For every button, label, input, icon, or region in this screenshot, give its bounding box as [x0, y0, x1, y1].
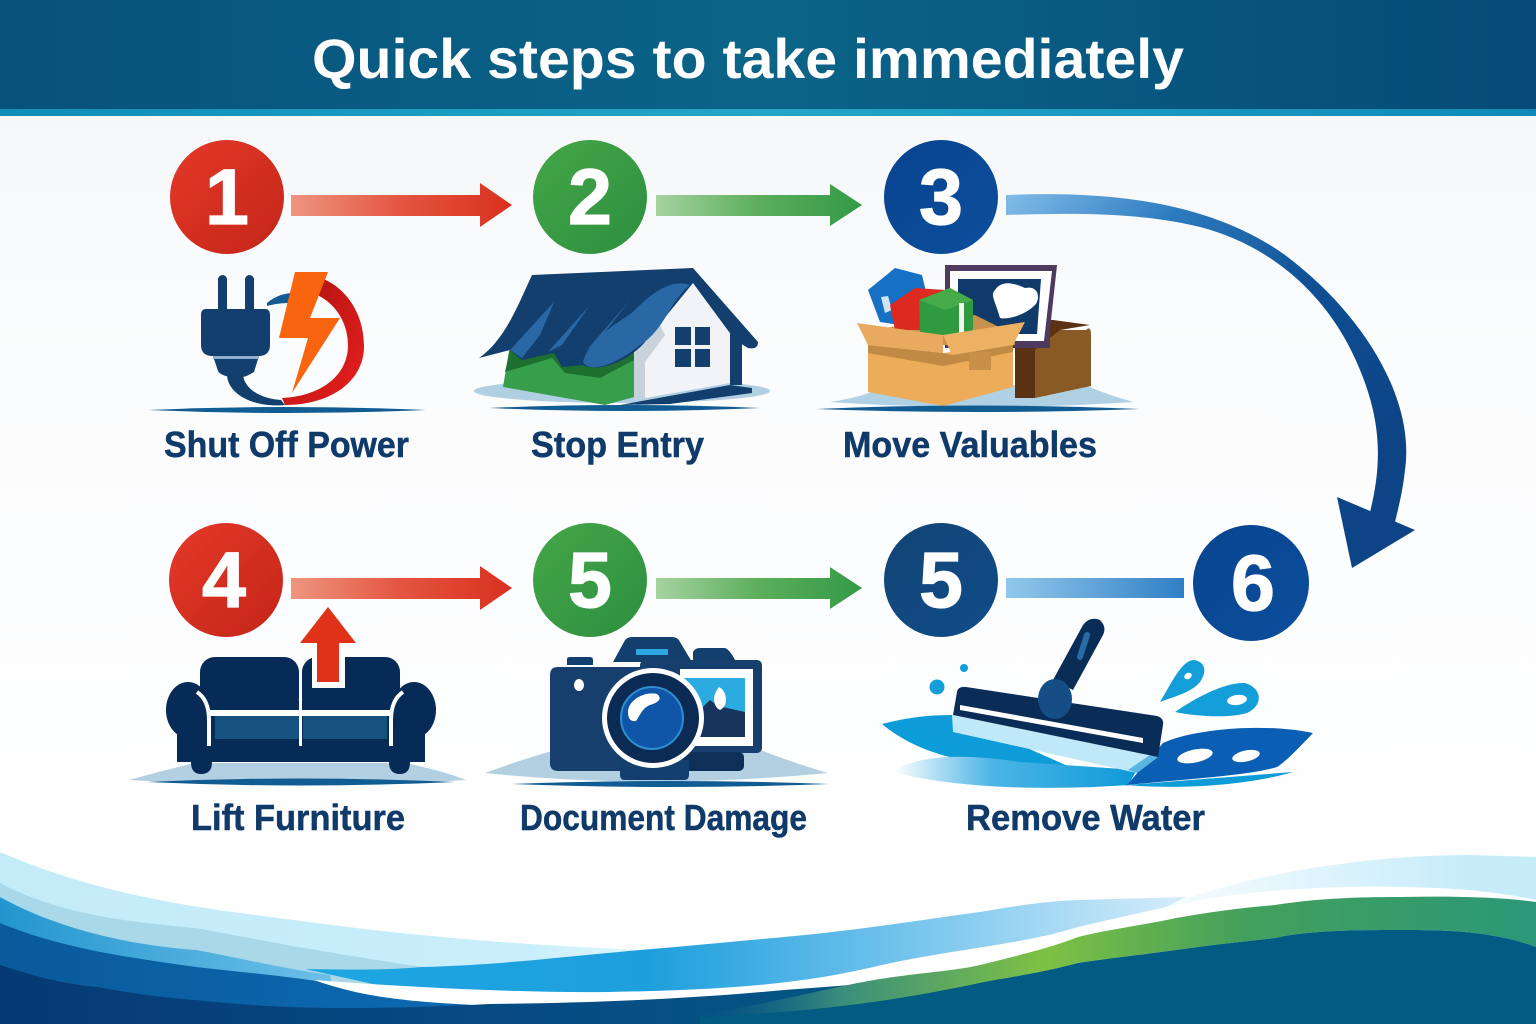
icon: sofa with lift arrow — [129, 607, 466, 786]
step 1 number badge: 1 — [205, 152, 249, 241]
step 6 number badge: 6 — [1231, 538, 1275, 627]
label: remove water: Remove Water — [966, 797, 1205, 838]
header band — [0, 0, 1536, 116]
icon: camera with photo — [485, 637, 829, 787]
step 4 number badge: 4 — [202, 535, 246, 624]
connector: step 5 to step 6 — [1006, 578, 1184, 598]
arrow: step 4 to step 5 — [291, 566, 512, 610]
step 2 number badge: 2 — [568, 152, 612, 241]
footer wave layers — [0, 852, 1536, 1024]
step 6 number badge — [1193, 525, 1309, 641]
icon: moving boxes and valuables — [816, 265, 1140, 412]
step 2 number badge — [533, 140, 647, 254]
icon: house with tarp — [474, 268, 770, 411]
step 3 number badge — [884, 140, 998, 254]
label: document damage: Document Damage — [520, 797, 807, 838]
step 5 number badge — [533, 523, 647, 637]
curved arrow: step 3 to step 6 — [1006, 194, 1415, 568]
icon: squeegee and water — [882, 619, 1313, 788]
label: move valuables: Move Valuables — [843, 424, 1097, 465]
step 4 number badge — [169, 523, 283, 637]
label: stop entry: Stop Entry — [531, 424, 704, 465]
step 3 number badge: 3 — [919, 152, 963, 241]
step 5 number badge: 5 — [568, 535, 612, 624]
second step 5 number badge — [884, 523, 998, 637]
step 1 number badge — [170, 140, 284, 254]
arrow: step 1 to step 2 — [291, 183, 512, 227]
icon: plug and lightning — [148, 272, 426, 413]
arrow: step 5 to second step 5 — [656, 567, 862, 609]
label: lift furniture: Lift Furniture — [191, 797, 405, 838]
arrow: step 2 to step 3 — [656, 184, 862, 226]
label: shut off power: Shut Off Power — [164, 424, 409, 465]
second step 5 number badge: 5 — [919, 535, 963, 624]
title: Quick steps to take immediately — [312, 27, 1184, 90]
